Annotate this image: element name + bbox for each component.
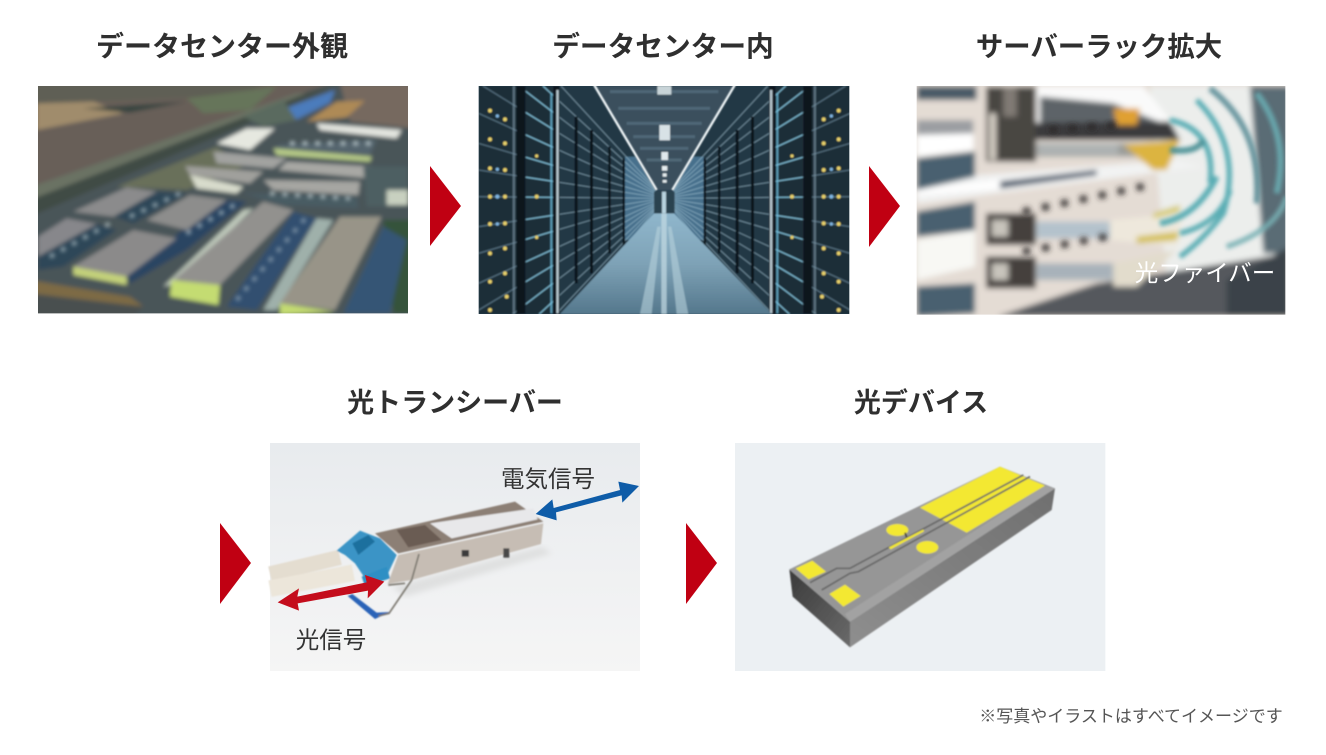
wire bail [378,554,419,616]
title: データセンター外観: データセンター外観 [96,30,348,62]
panel: server rack close-up photo [910,80,1297,320]
title: 光デバイス: 光デバイス [854,387,988,418]
floor [560,213,772,314]
title: サーバーラック拡大: サーバーラック拡大 [976,31,1222,62]
right racks mirrored [672,86,850,314]
label: 光信号: 光信号 [296,627,366,653]
blue connector [337,531,397,580]
transceiver side [388,523,543,584]
illustration background [735,443,1105,671]
right face [850,488,1055,647]
left face [789,569,850,647]
yellow electrode [920,467,1045,533]
yellow boots [1113,108,1140,125]
transceivers [986,87,1036,162]
footnote: ※写真やイラストはすべてイメージです [979,707,1283,726]
waveguide [810,475,1030,590]
left racks [478,86,656,314]
arrow: exterior to interior [430,166,461,246]
upper campus [217,128,275,150]
panel: optical device illustration [735,443,1105,671]
ceiling [593,86,735,190]
panel: data center exterior photo [30,80,417,320]
blue pull tab [348,594,390,619]
arrow: interior to rack [869,166,900,247]
dark latch stripes [1023,125,1150,252]
big roofs [38,218,97,257]
holes [462,550,469,557]
dark cooling rows [38,224,117,270]
teal fibers [1160,88,1287,257]
photo background [270,443,640,671]
label: 光ファイバー: 光ファイバー [1135,260,1275,286]
soft shadow [392,547,552,597]
ceiling light strips [594,85,735,190]
label: 電気信号: 電気信号 [501,466,595,492]
signal arrow: optical [278,575,384,611]
blurred cable background [1150,86,1274,274]
top face [789,467,1055,622]
title: データセンター内: データセンター内 [552,31,774,62]
signal arrow: electrical [536,482,639,520]
end of aisle [654,192,675,213]
title: 光トランシーバー: 光トランシーバー [347,388,563,418]
fibers [270,557,340,574]
panel: optical transceiver photo [270,443,640,671]
pads [796,561,826,579]
panel: data center interior photo [478,86,850,314]
arrow: rack to transceiver [220,523,251,604]
arrow: transceiver to device [686,523,717,604]
unit dots along roofs [50,143,373,300]
top [375,502,543,553]
